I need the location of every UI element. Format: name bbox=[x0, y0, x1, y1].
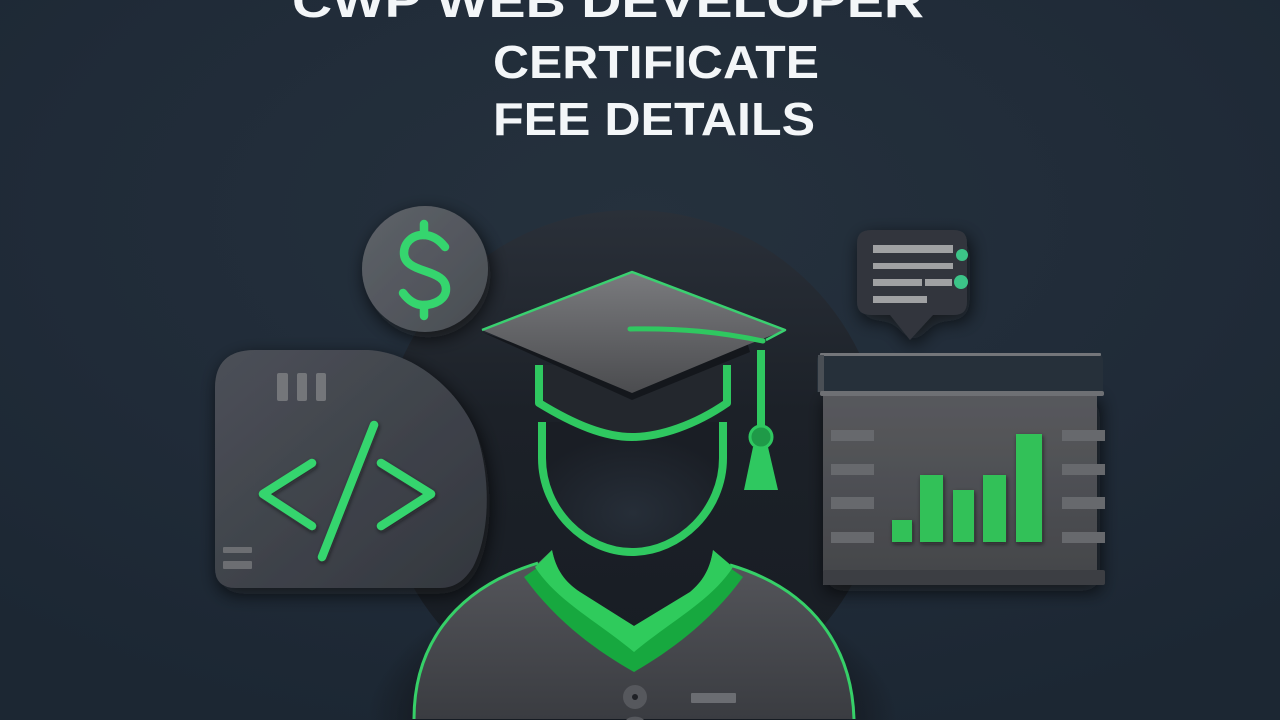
title: FEE DETAILS bbox=[493, 93, 815, 145]
tassel bbox=[744, 350, 778, 490]
speech bubble bbox=[857, 230, 968, 340]
cap band bbox=[539, 365, 727, 437]
button lower bbox=[626, 717, 644, 720]
dollar sign bbox=[403, 224, 446, 316]
shoulder outline right bbox=[730, 565, 854, 719]
face outline bbox=[542, 422, 723, 552]
icon: dollar coin bbox=[362, 206, 488, 332]
title: CERTIFICATE bbox=[493, 36, 819, 88]
card header bbox=[817, 353, 1104, 396]
right ticks bbox=[1062, 430, 1105, 543]
menu lines bbox=[223, 547, 252, 569]
window dots bbox=[277, 373, 326, 401]
graduate figure bbox=[414, 272, 854, 720]
shoulders bbox=[414, 550, 854, 720]
backdrop disc behind graduate bbox=[368, 210, 896, 720]
cap strap bbox=[630, 329, 763, 341]
collar bbox=[524, 550, 743, 672]
button top bbox=[623, 685, 647, 709]
bubble text lines bbox=[873, 245, 953, 303]
panel: code window bbox=[215, 350, 487, 588]
bubble status dots bbox=[954, 249, 968, 289]
bar chart bbox=[892, 434, 1042, 542]
icon: code brackets bbox=[263, 425, 431, 557]
card body bbox=[823, 393, 1097, 585]
left ticks bbox=[831, 430, 874, 543]
mortarboard bbox=[482, 272, 785, 400]
card footer bbox=[823, 570, 1105, 585]
pocket line bbox=[691, 693, 736, 703]
title bbox=[292, 0, 924, 145]
panel: bar chart card bbox=[817, 353, 1105, 585]
shoulder outline left bbox=[414, 563, 538, 719]
